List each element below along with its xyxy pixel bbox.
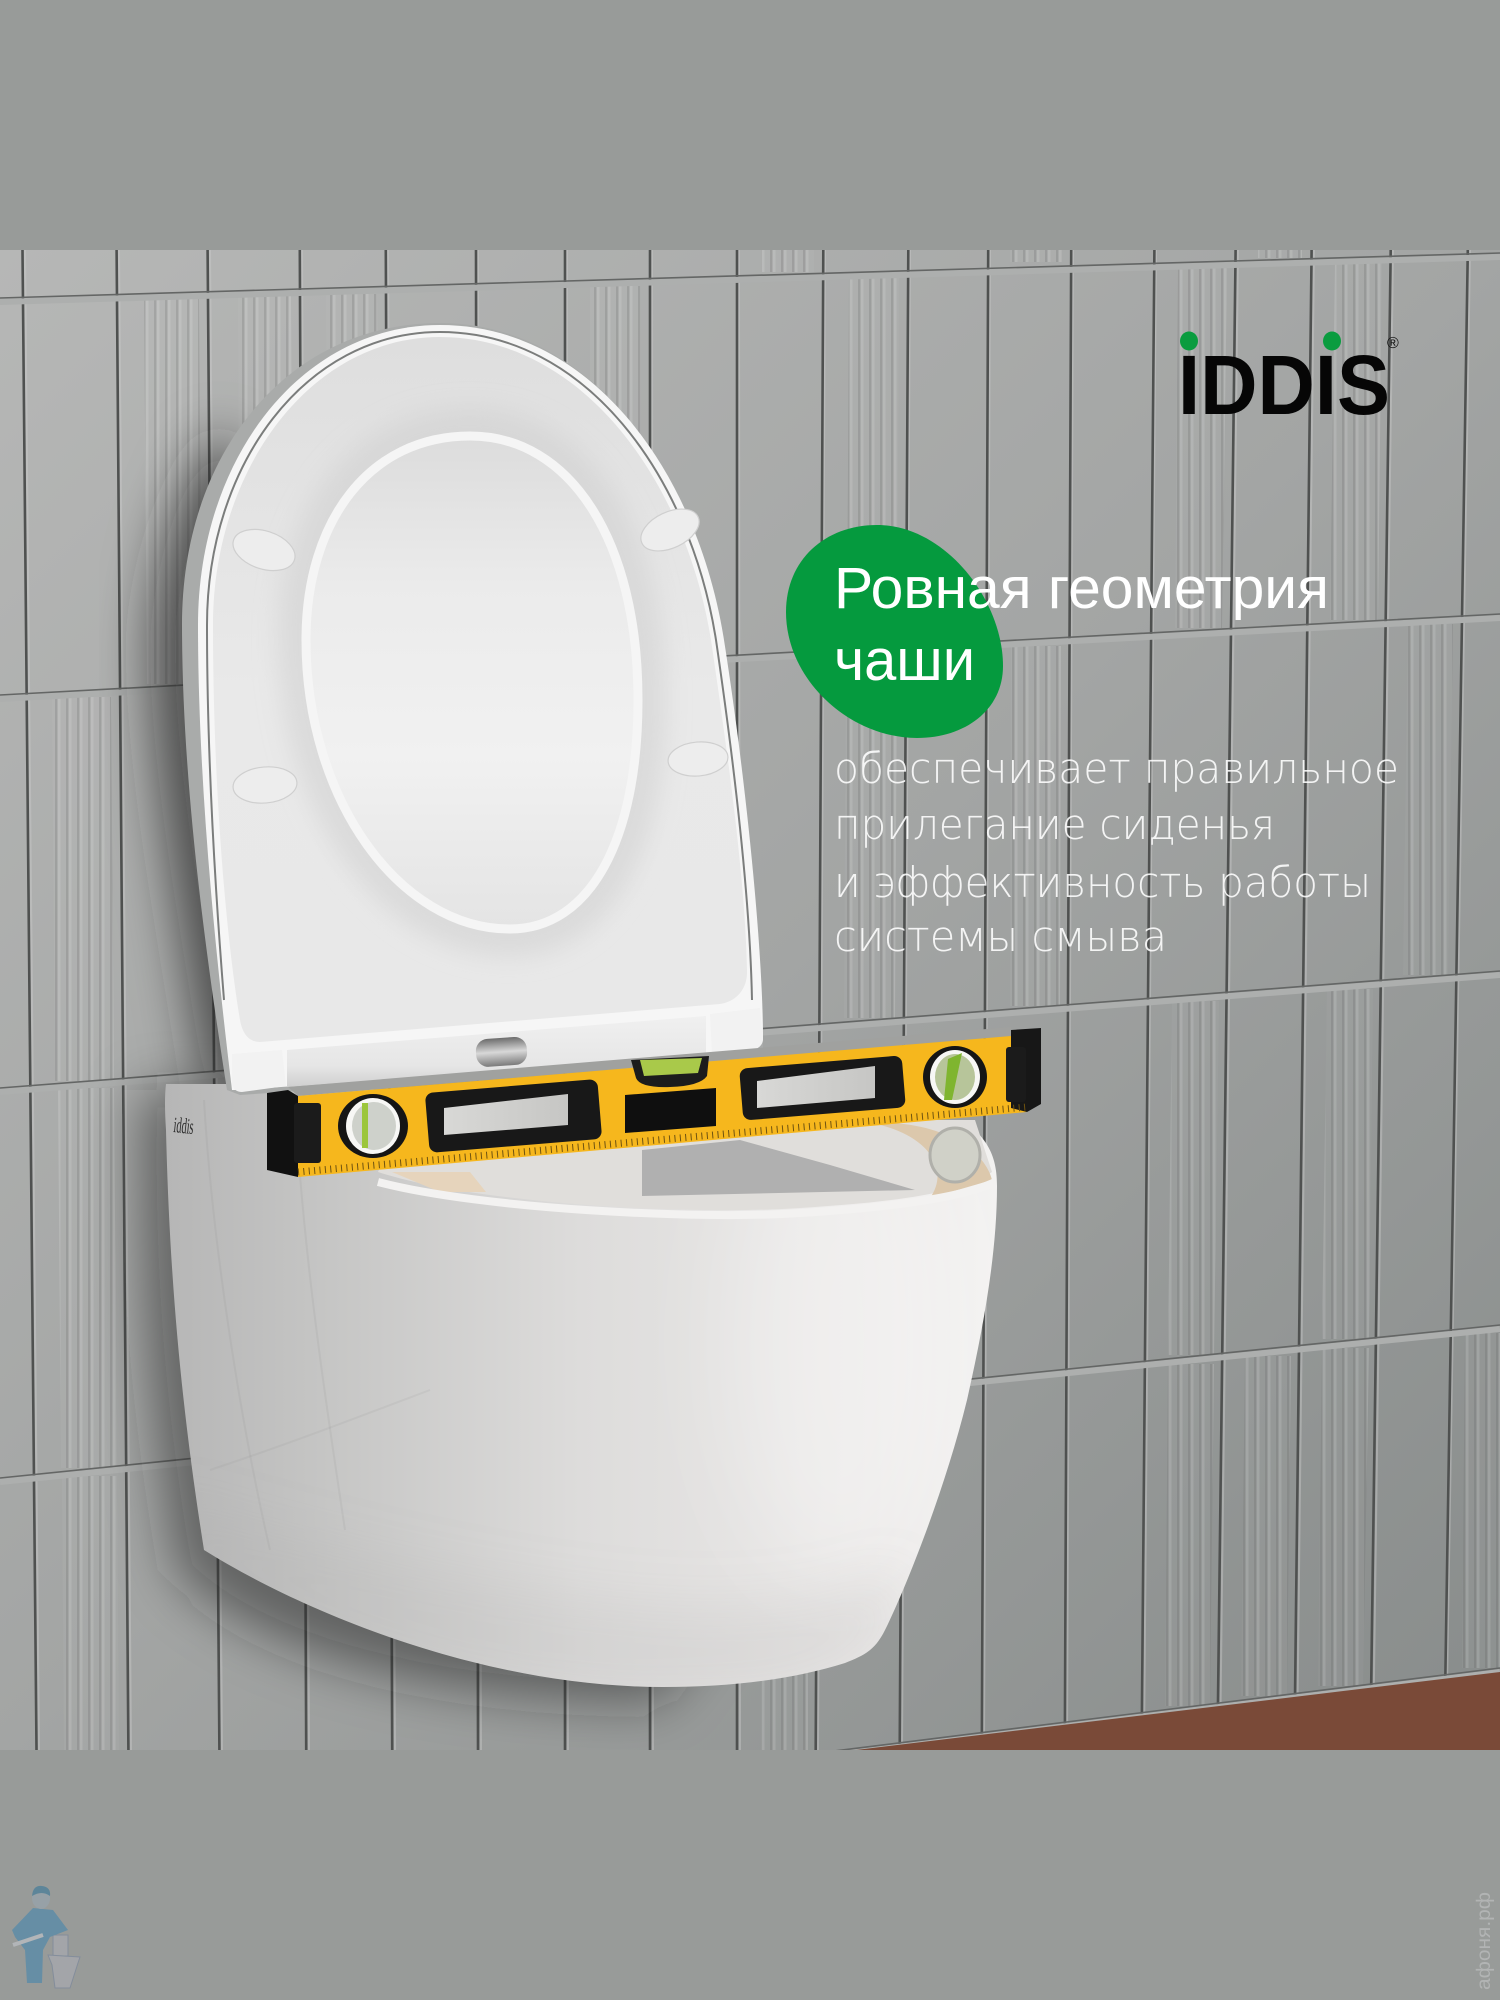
bowl basin <box>378 1120 992 1210</box>
ruler ticks <box>298 1107 1027 1172</box>
vial reflection <box>930 1128 980 1182</box>
level center label <box>625 1088 716 1133</box>
logo IDDIS <box>1178 332 1399 432</box>
right handle <box>1006 1047 1026 1102</box>
logo registered mark: ® <box>1387 335 1399 352</box>
window left <box>425 1079 602 1153</box>
lid rim line <box>207 332 752 1000</box>
left vial <box>338 1094 408 1158</box>
right vial <box>923 1046 987 1108</box>
bumper bottom left <box>232 766 298 804</box>
lid opening <box>306 436 638 929</box>
body text: и эффективность работы <box>834 858 1371 907</box>
hinge bar <box>287 1026 706 1087</box>
left end cap <box>267 1090 298 1177</box>
level top face <box>288 1027 1011 1096</box>
watermark plumber icon <box>12 1886 80 1988</box>
heading: Ровная геометрия <box>834 556 1329 621</box>
lid side <box>182 323 763 1095</box>
chrome button <box>475 1036 528 1068</box>
lid groove <box>306 436 638 929</box>
left reflection <box>392 1172 486 1192</box>
window right <box>739 1055 906 1121</box>
toilet bowl <box>160 1084 997 1701</box>
heading: чаши <box>834 628 975 693</box>
lid rim <box>198 325 763 1090</box>
body text <box>834 744 1399 961</box>
body text: обеспечивает правильное <box>834 744 1399 793</box>
level yellow body <box>298 1036 1027 1177</box>
bowl rim <box>378 1182 995 1215</box>
basin shadow <box>642 1140 915 1196</box>
bowl body <box>165 1084 997 1687</box>
toilet bowl: iddis <box>172 1112 195 1139</box>
bumper top right <box>640 508 700 552</box>
right end cap <box>1011 1028 1041 1112</box>
hinge right end <box>758 1040 763 1048</box>
basin reflection <box>881 1124 992 1196</box>
logo dot two <box>1323 332 1341 350</box>
logo wordmark: IDDIS <box>1178 338 1390 432</box>
body text: системы смыва <box>834 912 1167 961</box>
lid underside <box>213 337 747 1042</box>
watermark site text: афоня.рф <box>1474 1892 1495 1990</box>
bumper top left <box>232 528 296 572</box>
bumper bottom right <box>668 741 728 777</box>
left handle <box>294 1103 321 1163</box>
spirit level <box>267 1027 1041 1177</box>
top vial <box>631 1056 709 1087</box>
body text: прилегание сиденья <box>834 800 1275 849</box>
heading <box>834 556 1329 693</box>
hinge left end <box>236 1087 278 1092</box>
green accent blob <box>786 525 1003 738</box>
shadow on wall <box>139 430 800 1700</box>
floor <box>856 1672 1500 1750</box>
logo dot one <box>1180 332 1198 350</box>
toilet seat lid <box>182 323 763 1095</box>
